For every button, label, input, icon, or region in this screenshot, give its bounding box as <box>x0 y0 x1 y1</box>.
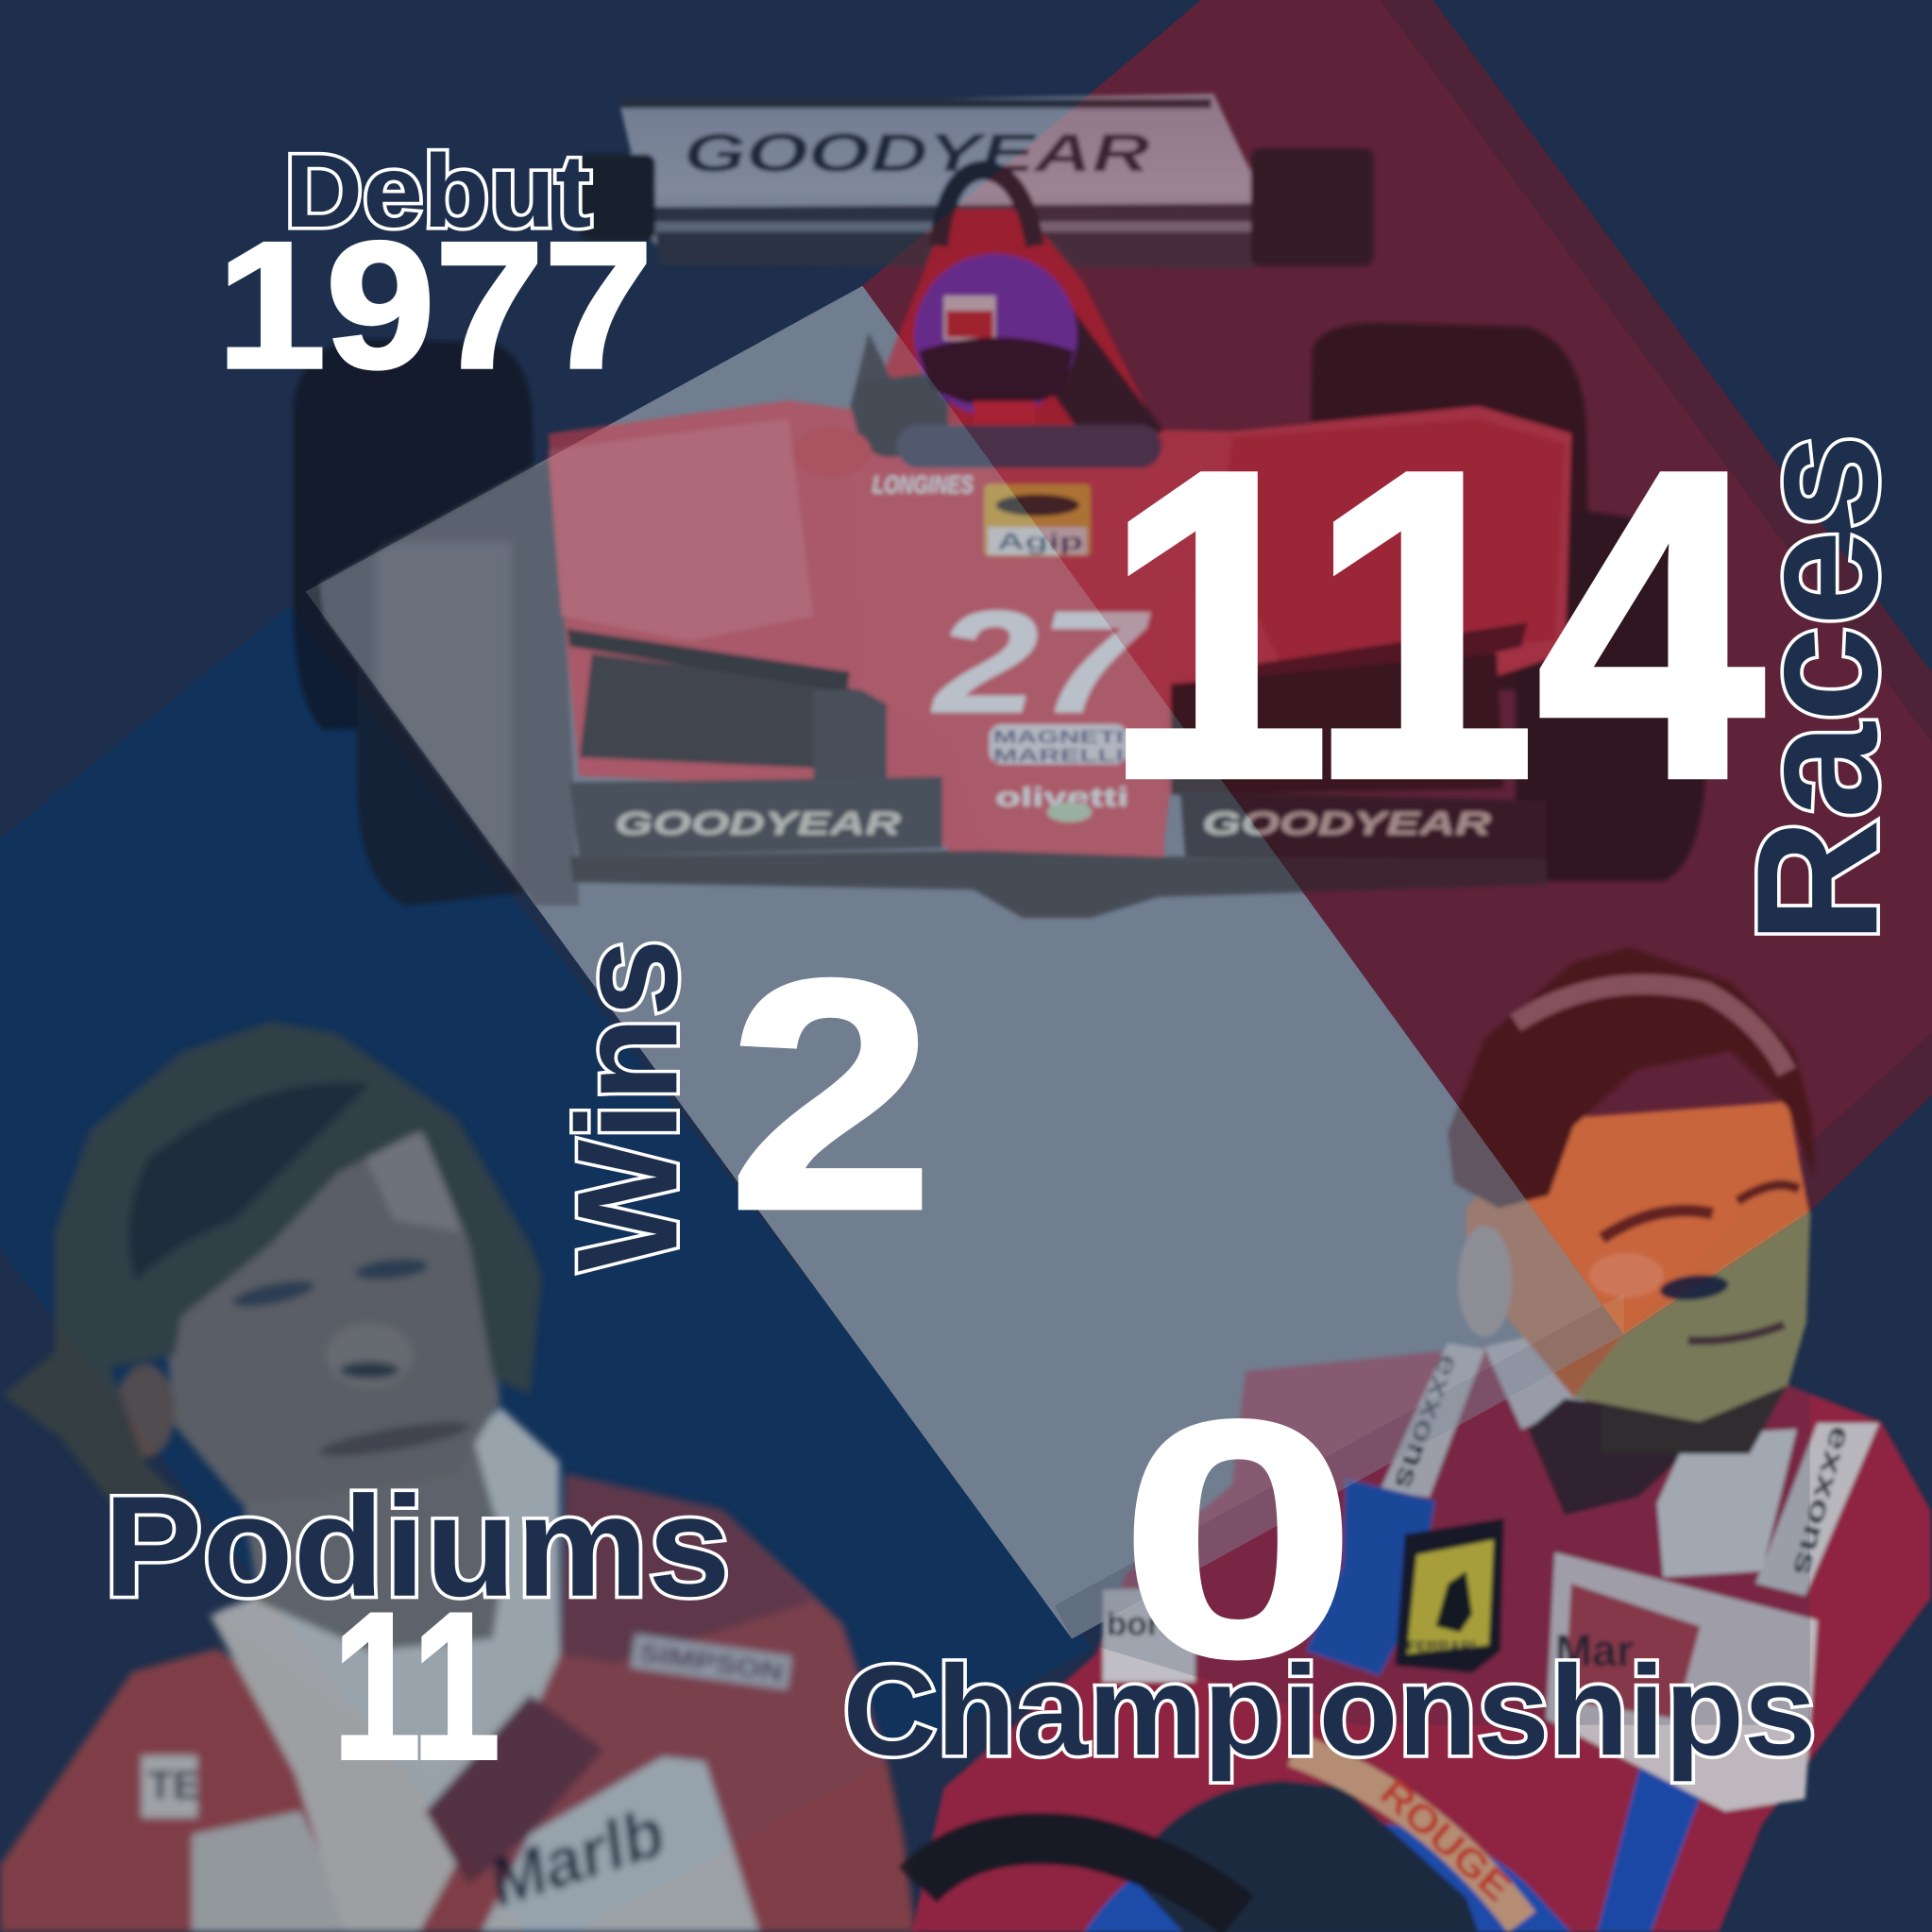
Agip sticker: Agip <box>997 530 1083 555</box>
front wings: GOODYEAR <box>615 805 902 841</box>
sponsor lettering <box>873 470 1151 822</box>
photo: right driver <box>912 947 1931 1932</box>
right shoulder strap: exxons <box>1787 1422 1858 1580</box>
shape: dark red diamond edge <box>862 0 1932 1334</box>
Ferrari badge <box>1395 1518 1504 1673</box>
left shoulder strap <box>1380 1343 1484 1497</box>
Marlboro lettering: Marlb <box>480 1794 673 1922</box>
hair <box>1448 947 1814 1209</box>
SIMPSON patch <box>631 1635 791 1689</box>
wins label: Wins <box>548 939 707 1272</box>
rear wing <box>579 93 1374 268</box>
harness straps <box>1303 1477 1702 1932</box>
podiums number: 11 <box>332 1569 500 1804</box>
airbox and hoop <box>850 170 1164 458</box>
sponsor lettering: MAGNETI <box>993 727 1124 748</box>
Agip sticker <box>985 484 1091 555</box>
sponsor lettering: 27 <box>930 581 1151 743</box>
podiums label: Podiums <box>104 1467 731 1627</box>
sponsor lettering: LONGINES <box>873 470 974 499</box>
front tyres <box>318 457 1707 907</box>
shape: grey diamond <box>306 286 1624 1638</box>
shape: darker grey strip <box>1055 1294 1624 1638</box>
neck and collar <box>1484 1337 1796 1577</box>
races label: Races <box>1720 433 1913 944</box>
hair <box>3 1022 542 1516</box>
wins stat <box>548 913 934 1278</box>
rear tyres <box>294 323 1589 729</box>
helmet <box>1084 1750 1571 1932</box>
sponsor lettering: olivetti <box>995 782 1128 811</box>
wing lettering: GOODYEAR <box>684 123 1150 183</box>
neck scarf <box>217 1407 559 1774</box>
Ferrari badge: FERRARI <box>1407 1638 1476 1654</box>
debut heading: Debut <box>284 134 591 249</box>
driver helmet <box>914 254 1076 424</box>
championships label: Championships <box>843 1638 1816 1782</box>
race suit <box>0 1474 916 1932</box>
debut label <box>217 134 653 406</box>
face <box>116 1130 500 1503</box>
neck <box>240 1442 505 1651</box>
nose cone <box>792 425 1208 918</box>
chest sponsor patches: Mar <box>1555 1625 1634 1675</box>
left shoulder strap: exxons <box>1387 1349 1467 1494</box>
lower face <box>1573 1212 1810 1422</box>
chest sponsor patches <box>1103 1552 1818 1811</box>
photo: racing car <box>294 93 1706 918</box>
helmet: ROUGE <box>1372 1770 1520 1910</box>
championships number: 0 <box>1120 1352 1357 1726</box>
sponsor lettering: MARELLI <box>993 745 1124 766</box>
front wings: GOODYEAR <box>1203 805 1492 841</box>
race suit <box>912 1347 1931 1932</box>
race suit: TE <box>148 1763 200 1808</box>
championships stat <box>843 1352 1816 1782</box>
SIMPSON patch: SIMPSON <box>637 1637 785 1686</box>
car body <box>549 400 1571 887</box>
races stat <box>1103 380 1913 944</box>
steering wheel <box>918 1839 1238 1916</box>
shape: blue diamond <box>0 606 1092 1932</box>
right shoulder strap <box>1755 1422 1879 1596</box>
debut year: 1977 <box>217 206 653 406</box>
wins number: 2 <box>728 913 934 1278</box>
shape: red diamond <box>862 0 1932 1334</box>
podiums stat <box>104 1467 731 1804</box>
photo: left driver <box>0 1022 916 1932</box>
races number: 114 <box>1103 380 1767 870</box>
head <box>1458 1102 1810 1454</box>
front wings <box>569 776 1547 918</box>
chest sponsor patches: boro <box>1107 1606 1180 1643</box>
